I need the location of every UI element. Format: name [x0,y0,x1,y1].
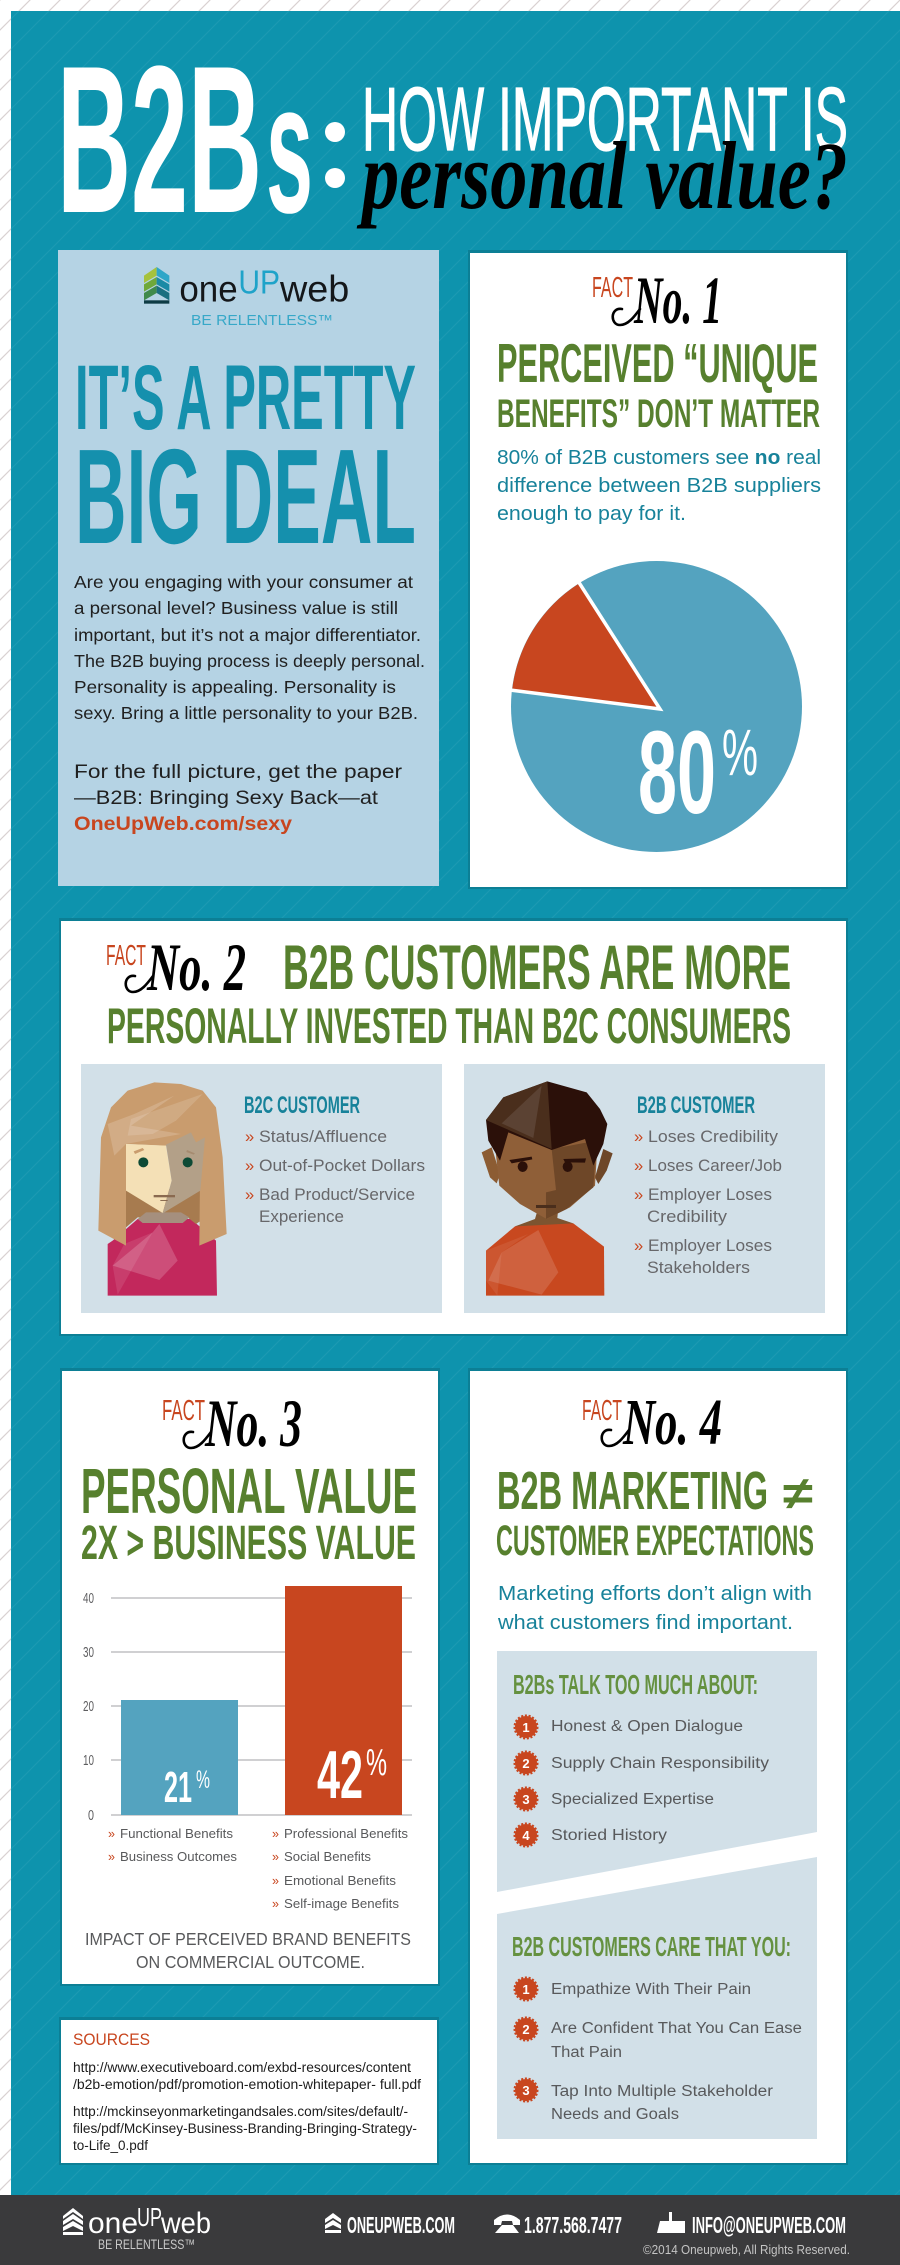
fact label 1: FACT [592,272,633,304]
list: talk too much [515,1716,769,1846]
list: talk too much: Honest & Open Dialogue [551,1718,743,1735]
icon: woman [98,1082,227,1296]
bar chart [83,1586,412,1824]
pie chart: 80% [510,561,802,852]
list: B2B customer: Credibility [647,1208,728,1226]
list: chart legend: Social Benefits [284,1850,371,1864]
list: B2C customer: Bad Product/Service [259,1186,415,1204]
text block: fact 1: 80% of B2B customers see no real [497,447,821,469]
bar chart: 21 [164,1763,192,1812]
text block: sources: /b2b-emotion/pdf/promotion-emotion-whitepaper- full.pdf [73,2077,421,2092]
text block: sources: http://mckinseyonmarketingandsales.com/sites/default/- [73,2104,408,2119]
fact label 1: No. 1 [633,262,722,338]
list: care that you: 3 [522,2083,530,2098]
copyright: ©2014 Oneupweb, All Rights Reserved. [643,2242,850,2257]
text block: get the paper: OneUpWeb.com/sexy [74,813,292,835]
icon: man [482,1081,613,1296]
list: B2B customer: » [634,1237,643,1255]
text block: intro [74,572,425,723]
bar chart: % [196,1766,210,1794]
logo: oneupweb: one [179,268,238,310]
list: care that you: Needs and Goals [551,2106,679,2123]
list: chart legend: Self-image Benefits [284,1897,399,1911]
heading: fact 1 [497,332,820,436]
title: s [266,46,313,252]
text block: fact 1: difference between B2B suppliers [497,475,821,497]
pie chart: 80%: % [722,715,758,789]
contact: phone: 1.877.568.7477 [524,2212,622,2238]
sub-panel: B2B customer [464,1064,825,1313]
list: talk too much: Storied History [551,1827,667,1844]
heading: fact 3: 2X > BUSINESS VALUE [81,1517,416,1570]
fact label 4: FACT [582,1395,622,1427]
text block: sources [73,2060,421,2153]
list: care that you [515,1978,802,2123]
list: chart legend: » [108,1850,115,1864]
text block: intro: Are you engaging with your consumer at [74,572,413,592]
text block: get the paper [74,761,403,835]
fact label 4 [582,1386,722,1459]
list: care that you: Are Confident That You Can Ease [551,2020,802,2037]
panel: fact 2 [59,918,848,1336]
logo: footer [63,2202,211,2252]
list: B2B customer: Employer Loses [648,1186,772,1204]
list: talk too much: 1 [522,1720,530,1735]
list: care that you: Empathize With Their Pain [551,1981,751,1998]
sub-panel: B2B customers care that you [497,1857,817,2139]
list: B2C customer: Experience [259,1208,344,1226]
list: chart legend: Emotional Benefits [284,1874,396,1888]
list: B2B customer: Employer Loses [648,1237,772,1255]
title: B2B [57,22,262,257]
list: chart legend: Functional Benefits [120,1827,233,1841]
text block: sources: to-Life_0.pdf [73,2138,148,2153]
contact: phone [494,2212,622,2238]
list: B2B customer: Loses Credibility [648,1128,779,1146]
heading: B2B customer: B2B CUSTOMER [637,1092,755,1119]
title [57,22,848,257]
list: B2B customer: » [634,1128,643,1146]
heading: fact 4 [496,1461,814,1565]
list: care that you: 1 [522,1982,530,1997]
footer [0,2195,900,2265]
panel: it's a pretty big deal [58,250,439,886]
caption: chart [85,1929,411,1972]
list: chart legend: » [272,1897,279,1911]
list: chart legend: » [272,1850,279,1864]
heading: sources: SOURCES [73,2030,150,2049]
list: B2B customer: » [634,1186,643,1204]
sub-panel: B2Bs talk too much about [497,1651,817,1892]
text block: fact 4 [497,1583,812,1634]
text block: fact 4: what customers find important. [497,1612,793,1634]
fact label 3 [162,1385,302,1461]
text block: sources: http://www.executiveboard.com/exbd-resources/content [73,2060,411,2075]
list: care that you: That Pain [551,2044,622,2061]
list: B2C customer: » [245,1128,254,1146]
list: talk too much: 4 [522,1828,530,1843]
caption: chart: IMPACT OF PERCEIVED BRAND BENEFITS [85,1929,411,1949]
bar chart: 40 [83,1591,94,1607]
list: chart legend [108,1827,408,1911]
fact label 3: FACT [162,1395,205,1427]
heading: fact 4: ≠ [783,1467,813,1519]
list: talk too much: Specialized Expertise [551,1791,714,1808]
fact label 2 [106,929,246,1005]
text block: get the paper: For the full picture, get the paper [74,761,403,783]
sub-panel: B2C customer [81,1064,442,1313]
text block: intro: sexy. Bring a little personality to your B2B. [74,703,418,723]
list: B2C customer: Out-of-Pocket Dollars [259,1157,425,1175]
list: B2B customer: » [634,1157,643,1175]
logo: oneupweb: UP [238,265,280,302]
heading: fact 2 [107,933,791,1054]
bar chart: 20 [83,1699,94,1715]
contact: email [657,2212,846,2238]
contact: website [325,2212,455,2238]
contact: website: ONEUPWEB.COM [347,2212,455,2238]
panel: fact 1 [468,250,848,889]
panel: fact 3 [60,1368,440,1986]
list: care that you: 2 [522,2022,530,2037]
text block: intro: Personality is appealing. Personality is [74,677,396,697]
fact label 3: No. 3 [204,1385,302,1461]
fact label 2: No. 2 [146,929,246,1005]
text block: intro: a personal level? Business value is still [74,598,398,618]
list: chart legend: » [272,1827,279,1841]
bar chart: 30 [83,1645,94,1661]
fact label 4: No. 4 [622,1386,722,1459]
caption: chart: ON COMMERCIAL OUTCOME. [136,1952,365,1972]
text block: fact 4: Marketing efforts don’t align with [498,1583,812,1605]
list: B2C customer: » [245,1186,254,1204]
list: B2B customer: Stakeholders [647,1259,750,1277]
panel: sources [59,2017,439,2165]
heading: big deal: BIG DEAL [75,421,416,572]
heading: it's a pretty: IT’S A PRETTY [75,347,416,449]
list: chart legend: Business Outcomes [120,1850,237,1864]
text block: get the paper: —B2B: Bringing Sexy Back—at [74,787,379,809]
logo: footer: one [88,2207,138,2240]
list: B2C customer: » [245,1157,254,1175]
pie chart: 80%: 80 [638,707,716,839]
list: chart legend: Professional Benefits [284,1827,408,1841]
list: chart legend: » [272,1874,279,1888]
fact label 2: FACT [106,940,146,972]
heading: fact 3 [81,1455,417,1570]
bar chart: 0 [88,1808,94,1824]
logo: footer: UP [137,2202,162,2232]
list: B2B customer [634,1128,782,1277]
list: B2C customer: Status/Affluence [259,1128,387,1146]
panel: it's a pretty big deal: BE RELENTLESS™ [191,313,333,329]
list: talk too much: Supply Chain Responsibility [551,1755,769,1772]
bar chart: 10 [83,1753,94,1769]
list: B2B customer: Loses Career/Job [648,1157,782,1175]
list: chart legend: » [108,1827,115,1841]
list: care that you: Tap Into Multiple Stakeholder [551,2083,773,2100]
logo: oneupweb [144,265,349,310]
heading: B2C customer: B2C CUSTOMER [244,1092,360,1119]
list: talk too much: 2 [522,1756,530,1771]
text block: sources: files/pdf/McKinsey-Business-Branding-Bringing-Strategy- [73,2121,417,2136]
fact label 1 [592,262,722,338]
logo: footer: web [160,2207,211,2240]
text block: intro: important, but it’s not a major differentiator. [74,625,421,645]
bar chart: 42 [317,1737,363,1813]
list: B2C customer [245,1128,425,1226]
heading: fact 3: PERSONAL VALUE [81,1455,417,1527]
bar chart: % [366,1742,387,1784]
text block: intro: The B2B buying process is deeply personal. [74,651,425,671]
text block: fact 1: enough to pay for it. [497,503,686,525]
logo: footer: BE RELENTLESS™ [98,2236,195,2252]
text block: fact 1 [497,447,821,525]
panel: fact 4 [468,1368,848,2165]
logo: oneupweb: web [279,268,349,310]
list: talk too much: 3 [522,1792,530,1807]
